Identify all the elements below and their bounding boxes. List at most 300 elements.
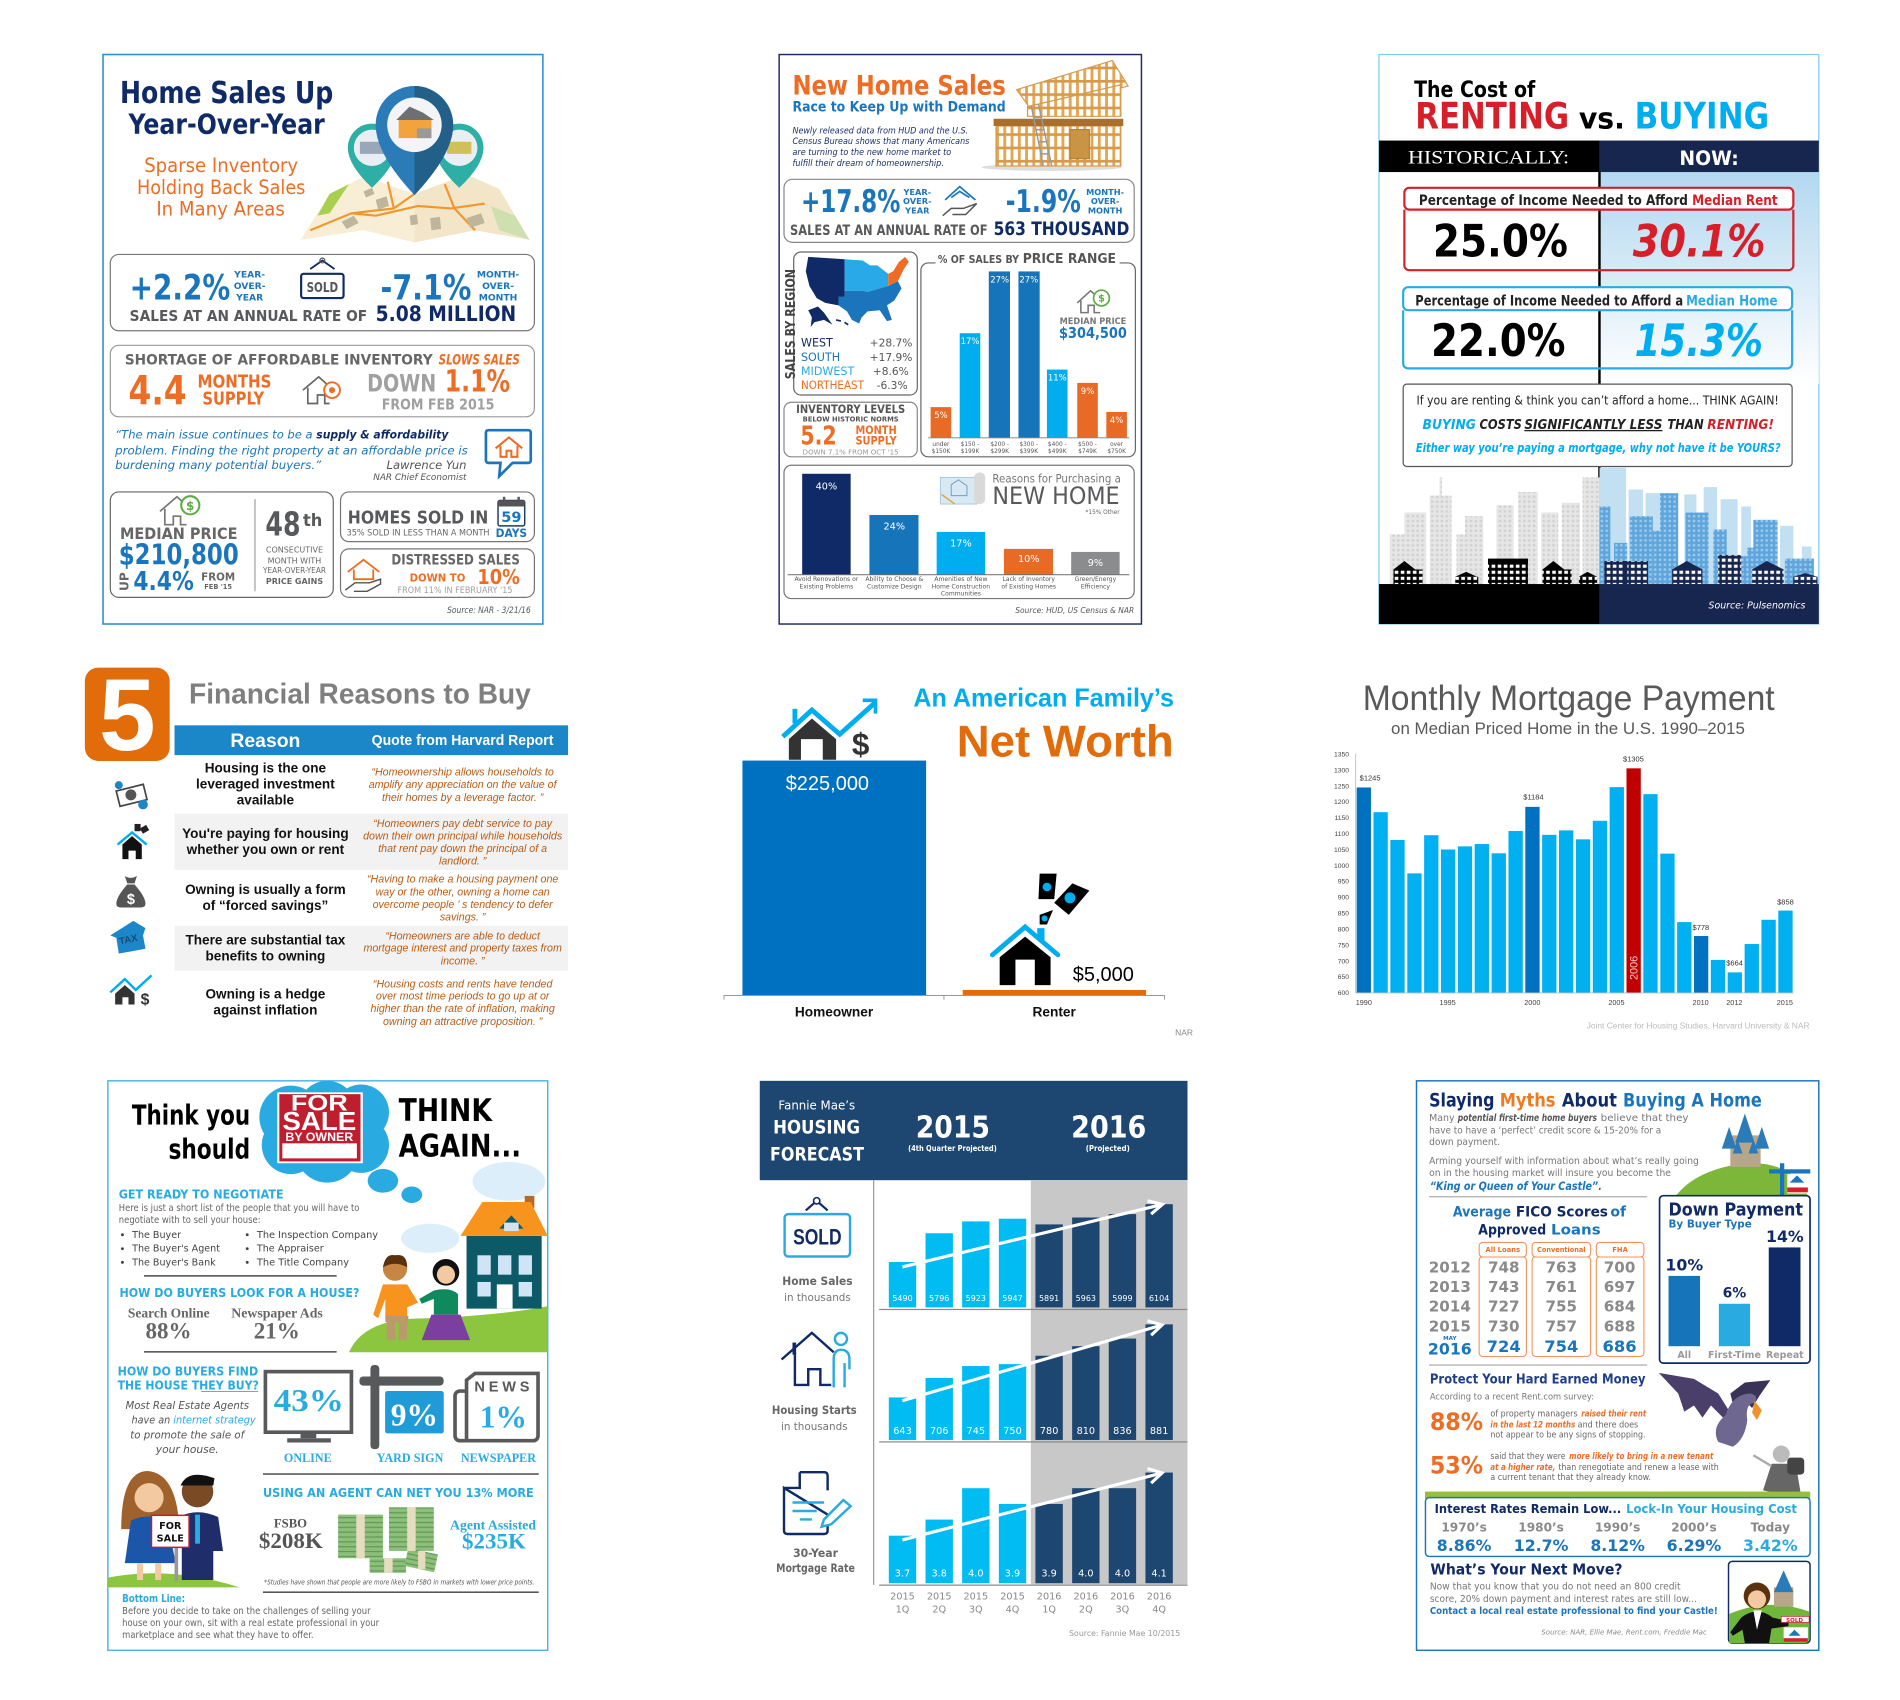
- panel: distressed sales: DOWN TO: [410, 573, 466, 585]
- heading: An American Family’s: [913, 684, 1174, 712]
- quotes column: way or the other, owning a home can: [376, 886, 550, 898]
- panel: interest rates: Interest Rates Remain Low...: [1435, 1502, 1621, 1516]
- source: Source: Pulsenomics: [1709, 600, 1805, 611]
- panel: sales stats: 563 THOUSAND: [994, 219, 1129, 240]
- section: protect money: 88%: [1430, 1408, 1483, 1436]
- icon: knight: [1753, 1446, 1804, 1493]
- section: negotiate: The Buyer's Bank: [131, 1257, 216, 1268]
- region table: MIDWEST: [801, 365, 854, 378]
- title: AGAIN...: [399, 1129, 521, 1165]
- icon: dragon: [1659, 1373, 1770, 1447]
- stat: online monitor: ONLINE: [284, 1451, 332, 1465]
- panel: distressed sales: [341, 549, 534, 597]
- chart: mortgage rate: 3.7: [895, 1569, 910, 1580]
- heading: Net Worth: [957, 716, 1174, 767]
- chart: mortgage rate: 4.0: [968, 1569, 984, 1580]
- bars: $500 -: [1078, 442, 1097, 448]
- quote: burdening many potential buyers.”: [115, 458, 322, 472]
- label: housing starts: [772, 1404, 857, 1433]
- panel: homes sold in days: 35% SOLD IN LESS THAN A MONTH: [347, 528, 490, 538]
- skyline: [1379, 468, 1819, 624]
- reasons column: You're paying for housing: [182, 826, 349, 841]
- section: protect money: said that they were: [1490, 1451, 1566, 1461]
- section: buyers look: Search Online: [128, 1305, 210, 1320]
- icon: sold sign: [301, 258, 344, 298]
- arrow: [902, 1469, 1162, 1540]
- panel: down payment: 10%: [1665, 1255, 1703, 1274]
- panel: median price: $210,800: [119, 539, 239, 572]
- bar chart: 800: [1338, 926, 1349, 933]
- label: home sales: [782, 1275, 853, 1304]
- icon: housing starts: [782, 1333, 849, 1387]
- panel: median home: Percentage of Income Needed to Afford a: [1415, 293, 1683, 309]
- panel: net worth chart: Homeowner: [795, 1005, 874, 1020]
- bars: $150 -: [961, 442, 979, 448]
- panel: median price: CONSECUTIVE: [266, 546, 323, 555]
- fico table: Average: [1453, 1205, 1511, 1221]
- panel: inventory shortage: SUPPLY: [202, 390, 264, 410]
- icon: sold sign: SOLD: [307, 281, 338, 296]
- title: [1414, 77, 1769, 137]
- section: how buyers find: HOW DO BUYERS FIND: [118, 1364, 258, 1379]
- section: negotiate: [119, 1188, 378, 1268]
- section: buyers look: 88%: [145, 1318, 191, 1344]
- stat: newspaper: [455, 1373, 538, 1465]
- intro text: Many: [1429, 1113, 1455, 1124]
- fico table: FHA: [1612, 1246, 1629, 1254]
- panel: median price: [110, 492, 333, 597]
- header: (4th Quarter Projected): [908, 1144, 997, 1153]
- table header: [175, 725, 568, 755]
- section: agent nets more: $208K: [259, 1529, 323, 1553]
- reasons column: benefits to owning: [205, 949, 325, 964]
- section: agent nets more: FSBO: [274, 1517, 307, 1531]
- panel: inventory shortage: 1.1%: [445, 364, 510, 399]
- panel: homes sold in days: DAYS: [496, 526, 527, 540]
- panel: homes sold in days: [341, 492, 534, 542]
- fico table: 2012: [1429, 1258, 1471, 1276]
- callout: think again: BUYING: [1423, 418, 1476, 433]
- section: how buyers find: have an: [132, 1413, 170, 1426]
- bars: $150K: [932, 449, 950, 455]
- bar chart: $664: [1726, 959, 1743, 968]
- panel: home sales up: [103, 55, 543, 624]
- chart: home sales: 5947: [1002, 1294, 1023, 1303]
- fico table: 748: [1488, 1258, 1520, 1276]
- title: The Cost of: [1414, 77, 1535, 103]
- quotes column: overcome people ’ s tendency to defer: [373, 899, 553, 911]
- reasons column: of “forced savings”: [202, 898, 328, 913]
- panel: inventory shortage: [110, 345, 534, 417]
- bars: of Existing Homes: [1001, 583, 1056, 590]
- bars: under: [932, 442, 950, 448]
- intro text: down payment.: [1429, 1137, 1500, 1148]
- panel: sales stats: OVER-: [482, 281, 514, 292]
- panel: monthly mortgage payment: [1334, 679, 1810, 1030]
- stat: yard sign: [359, 1365, 444, 1465]
- panel: down payment: Down Payment: [1669, 1200, 1803, 1220]
- icon: for sale cloud: FOR: [291, 1091, 348, 1116]
- reasons column: Housing is the one: [205, 761, 327, 776]
- panel: interest rates: Lock-In Your Housing Cost: [1626, 1502, 1797, 1516]
- title: About: [1562, 1090, 1617, 1111]
- fico table: 757: [1546, 1318, 1577, 1336]
- table header: Quote from Harvard Report: [372, 733, 554, 749]
- title: RENTING: [1415, 94, 1569, 137]
- bars: Home Construction: [932, 583, 990, 590]
- title: should: [168, 1132, 250, 1165]
- panel: median price: UP: [117, 572, 131, 591]
- section: negotiate: The Buyer's Agent: [131, 1244, 220, 1255]
- panel: sales stats: +17.8%: [801, 184, 900, 220]
- bar: homeowner: [742, 761, 926, 995]
- section: protect money: Protect Your Hard Earned Money: [1430, 1373, 1646, 1388]
- quotes column: income. ”: [441, 956, 485, 968]
- bars: $199K: [961, 449, 979, 455]
- fico table: 754: [1544, 1337, 1578, 1356]
- quote: supply & affordability: [316, 428, 450, 442]
- icon: speech bubble house: [486, 430, 531, 476]
- title: [792, 71, 1006, 115]
- bars: 5%: [934, 410, 948, 420]
- panel: inventory shortage: MONTHS: [198, 373, 271, 393]
- panel: median price: th: [303, 510, 322, 530]
- intro text: are turning to the new home market to: [792, 148, 951, 158]
- bars: $750K: [1107, 449, 1126, 455]
- region table: WEST: [801, 337, 833, 350]
- panel: price range chart: $304,500: [1059, 324, 1127, 342]
- reasons column: [182, 761, 349, 1018]
- panel: median rent: Median Rent: [1692, 193, 1778, 209]
- fico table: 684: [1604, 1298, 1635, 1316]
- illustration: agent with castle: SOLD: [1786, 1618, 1803, 1624]
- region table: NORTHEAST: [801, 379, 864, 392]
- panel: sales stats: +2.2%: [130, 267, 230, 308]
- panel: median home: [1403, 287, 1792, 368]
- chart: home sales: 5963: [1076, 1294, 1096, 1303]
- subtitle: [137, 154, 305, 221]
- icon: rising house: [783, 700, 875, 762]
- quarter labels: 2015: [890, 1591, 915, 1602]
- panel: inventory levels: SUPPLY: [855, 435, 898, 448]
- subtitle: Sparse Inventory: [144, 154, 298, 177]
- icon: for sale cloud: [259, 1081, 422, 1203]
- callout: think again: THAN: [1667, 418, 1704, 433]
- panel: sales by region: [784, 252, 917, 395]
- intro text: [1429, 1113, 1699, 1193]
- quotes column: “Housing costs and rents have tended: [373, 978, 553, 990]
- panel: sales stats: SALES AT AN ANNUAL RATE OF: [130, 307, 367, 325]
- bar chart: $1184: [1523, 793, 1544, 802]
- quotes column: that rent pay down the principal of a: [378, 843, 547, 855]
- fico table: MAY: [1443, 1336, 1457, 1342]
- panel: median price: MONTH WITH: [268, 556, 321, 565]
- bars: Amenities of New: [934, 576, 987, 583]
- bar: renter: $5,000: [1073, 964, 1134, 986]
- quotes column: amplify any appreciation on the value of: [369, 779, 558, 791]
- icon: money bag: $: [127, 892, 135, 908]
- panel: interest rates: [1425, 1492, 1810, 1556]
- section: how buyers find: internet strategy: [173, 1413, 256, 1426]
- bar chart: 2012: [1726, 998, 1742, 1007]
- panel: inventory levels: MONTH: [855, 424, 897, 437]
- region table: +28.7%: [870, 337, 912, 350]
- header: [760, 1081, 1187, 1180]
- stat: yard sign: 9%: [391, 1397, 438, 1432]
- illustration: agent with castle: [1729, 1561, 1810, 1643]
- quote: [114, 428, 468, 483]
- section: next move: Source: NAR, Ellie Mae, Rent.com, Freddie Mac: [1541, 1628, 1707, 1637]
- title: New Home Sales: [792, 71, 1006, 102]
- intro text: on in the housing market will insure you become the: [1429, 1168, 1671, 1179]
- panel: sales stats: MONTH: [1088, 205, 1122, 215]
- icon: rising house: $: [852, 726, 870, 762]
- panel: median price: PRICE GAINS: [266, 577, 323, 586]
- intro text: have to have a ‘perfect’ credit score & 15-20% for a: [1429, 1125, 1661, 1136]
- bars: Communities: [941, 591, 981, 598]
- panel: slaying myths: [1417, 1081, 1819, 1650]
- quarter labels: 4Q: [1006, 1604, 1020, 1615]
- panel: sales stats: YEAR-: [233, 269, 265, 280]
- illustration: house and couple: [349, 1162, 548, 1352]
- panel: sales stats: YEAR-: [902, 187, 931, 197]
- bars: over: [1110, 442, 1124, 448]
- panel: median price: 48: [265, 506, 301, 544]
- panel: interest rates: 3.42%: [1743, 1536, 1798, 1555]
- icon: house with clock: [303, 377, 340, 403]
- title: BUYING: [1635, 94, 1769, 137]
- callout: think again: SIGNIFICANTLY LESS: [1524, 418, 1662, 433]
- quarter labels: 2016: [1074, 1591, 1098, 1602]
- bars: 40%: [816, 482, 837, 493]
- panel: housing forecast: [760, 1081, 1187, 1638]
- section: negotiate: The Buyer: [131, 1230, 181, 1241]
- panel: down payment: [1660, 1196, 1810, 1363]
- label: mortgage rate: Mortgage Rate: [776, 1562, 855, 1575]
- fico table: 727: [1488, 1298, 1520, 1316]
- icon: median price house: $: [1098, 294, 1105, 305]
- arrow: [902, 1321, 1162, 1401]
- bar chart: 2005: [1608, 998, 1625, 1007]
- quotes column: “Homeowners pay debt service to pay: [373, 818, 553, 830]
- bottom line: Before you decide to take on the challenges of selling your: [122, 1606, 371, 1617]
- panel: new home sales: [779, 55, 1141, 624]
- panel: reasons for purchasing: *15% Other: [1086, 510, 1120, 516]
- label: home sales: Home Sales: [782, 1275, 853, 1288]
- label: housing starts: Housing Starts: [772, 1404, 857, 1417]
- icon: rising house: $: [141, 991, 150, 1008]
- callout: think again: [1403, 384, 1792, 467]
- quotes column: over most time periods to go up at or: [376, 991, 550, 1003]
- source: Source: HUD, US Census & NAR: [1015, 606, 1134, 615]
- chart: mortgage rate: 4.0: [1078, 1569, 1094, 1580]
- callout: think again: COSTS: [1480, 418, 1522, 433]
- icon: house in hand: [943, 187, 977, 216]
- bars: Efficiency: [1081, 583, 1110, 590]
- panel: five financial reasons: [85, 658, 568, 1028]
- bar chart: 950: [1338, 879, 1349, 886]
- icon: renter house with flying money: [992, 874, 1089, 985]
- icon: sold sign: [785, 1198, 850, 1257]
- section: negotiate: The Appraiser: [256, 1244, 324, 1255]
- bars: 17%: [961, 336, 979, 346]
- intro text: [792, 126, 970, 169]
- bars: 9%: [1081, 386, 1094, 396]
- bar: renter: [963, 964, 1146, 995]
- reasons column: Owning is a hedge: [205, 986, 326, 1001]
- quote: NAR Chief Economist: [373, 473, 467, 483]
- bar chart: 2010: [1693, 998, 1709, 1007]
- bars: $200 -: [990, 442, 1009, 448]
- title: Home Sales Up: [120, 76, 333, 111]
- heading: Monthly Mortgage Payment: [1363, 679, 1775, 718]
- chart: housing starts: 706: [930, 1426, 948, 1437]
- panel: price range chart: PRICE RANGE: [1023, 252, 1116, 267]
- bars: 10%: [1018, 554, 1040, 565]
- fico table: 2015: [1429, 1318, 1471, 1336]
- icon: mortgage document: [784, 1472, 851, 1534]
- stat: yard sign: YARD SIGN: [377, 1451, 444, 1465]
- icon: calendar: 59: [501, 510, 521, 526]
- panel: net worth chart: [724, 684, 1193, 1038]
- panel: net worth chart: NAR: [1175, 1028, 1193, 1038]
- panel: distressed sales: DISTRESSED SALES: [391, 553, 520, 569]
- quarter labels: 2015: [1000, 1591, 1025, 1602]
- panel: price range chart: MEDIAN PRICE: [1060, 317, 1126, 327]
- illustration: agents with for sale sign: SALE: [157, 1533, 184, 1544]
- section: protect money: than renegotiate and renew a lease with: [1558, 1462, 1719, 1472]
- icon: blueprint: [940, 473, 985, 504]
- panel: inventory levels: DOWN 7.1% FROM OCT '15: [803, 447, 899, 456]
- panel: sales stats: OVER-: [234, 281, 266, 292]
- panel: sales stats: MONTH-: [1086, 187, 1124, 197]
- arrow: [902, 1201, 1162, 1267]
- fico table: Conventional: [1537, 1246, 1586, 1254]
- chart: home sales: [879, 1201, 1187, 1310]
- quarter labels: 1Q: [896, 1604, 910, 1615]
- bars: 11%: [1048, 372, 1067, 382]
- heading: [913, 684, 1174, 767]
- quotes column: [363, 766, 563, 1028]
- chart: home sales: 6104: [1149, 1294, 1169, 1303]
- fico table: 697: [1604, 1278, 1635, 1296]
- intro text: potential first-time home buyers: [1457, 1113, 1597, 1124]
- title: [132, 1093, 521, 1165]
- section: protect money: at a higher rate,: [1490, 1462, 1555, 1472]
- section: buyers look: [120, 1286, 359, 1344]
- panel: sales stats: MONTH-: [477, 269, 519, 280]
- panel: inventory shortage: FROM FEB 2015: [382, 396, 494, 414]
- quotes column: owning an attractive proposition. ”: [383, 1016, 543, 1028]
- callout: think again: RENTING!: [1707, 418, 1774, 433]
- bar chart: [1334, 751, 1794, 1007]
- section: protect money: [1430, 1373, 1719, 1482]
- quarter labels: 2016: [1110, 1591, 1135, 1602]
- section: negotiate: The Title Company: [256, 1257, 349, 1268]
- section: next move: Now that you know that you do not need an 800 credit: [1430, 1582, 1681, 1593]
- quarter labels: 2015: [963, 1591, 988, 1602]
- stat: newspaper: NEWS: [474, 1380, 530, 1396]
- section: buyers look: Newspaper Ads: [231, 1305, 323, 1320]
- title: Buying A Home: [1623, 1090, 1762, 1111]
- fico table: Loans: [1551, 1223, 1601, 1239]
- section: protect money: 53%: [1430, 1451, 1483, 1479]
- bars: [788, 474, 1129, 598]
- panel: sales stats: OVER-: [903, 196, 932, 206]
- header: 2015: [916, 1111, 990, 1146]
- section: buyers look: HOW DO BUYERS LOOK FOR A HOUSE?: [120, 1286, 359, 1300]
- panel: interest rates: 8.12%: [1590, 1536, 1645, 1555]
- section: next move: What’s Your Next Move?: [1430, 1561, 1622, 1579]
- fico table: 688: [1604, 1318, 1635, 1336]
- intro text: “King or Queen of Your Castle”.: [1430, 1180, 1602, 1193]
- title: Slaying: [1429, 1090, 1495, 1111]
- panel: interest rates: 2000’s: [1671, 1521, 1717, 1535]
- bar chart: 650: [1338, 974, 1349, 981]
- section: protect money: of property managers: [1490, 1408, 1578, 1418]
- reasons column: leveraged investment: [196, 777, 335, 792]
- panel: median price: FROM: [201, 571, 235, 583]
- bar chart: 2000: [1524, 998, 1540, 1007]
- icon: for sale cloud: BY OWNER: [285, 1130, 353, 1144]
- icon: number five: 5: [99, 658, 156, 772]
- section: how buyers find: your house.: [155, 1443, 219, 1456]
- icon: tax house: [110, 921, 145, 954]
- reasons column: against inflation: [213, 1003, 317, 1018]
- bars: Ability to Choose &: [865, 576, 923, 583]
- bars: Avoid Renovations or: [795, 576, 859, 583]
- quarter labels: 2016: [1037, 1591, 1061, 1602]
- panel: median rent: 25.0%: [1433, 214, 1568, 267]
- chart: housing starts: 810: [1077, 1426, 1095, 1437]
- panel: median price: MEDIAN PRICE: [120, 524, 238, 543]
- panel: interest rates: Today: [1751, 1521, 1790, 1535]
- section: how buyers find: to promote the sale of: [130, 1428, 246, 1441]
- icon: rising house: [110, 975, 151, 1008]
- section: protect money: According to a recent Rent.com survey:: [1430, 1392, 1594, 1403]
- region table: [801, 337, 912, 392]
- bar chart: $1305: [1623, 755, 1644, 764]
- panel: reasons for purchasing: [784, 465, 1134, 599]
- bar chart: 1250: [1334, 783, 1349, 790]
- panel: sales stats: [784, 179, 1134, 242]
- panel: sales stats: YEAR: [904, 205, 930, 215]
- bars: Green/Energy: [1075, 576, 1117, 583]
- panel: median price: YEAR-OVER-YEAR: [262, 566, 326, 575]
- bars: $499K: [1048, 449, 1067, 455]
- bars: 9%: [1088, 558, 1103, 569]
- panel: inventory shortage: DOWN: [367, 369, 436, 397]
- bar chart: 700: [1338, 958, 1349, 965]
- icon: US map: [806, 257, 909, 327]
- label: mortgage rate: [776, 1547, 855, 1575]
- bar chart: 750: [1338, 942, 1349, 949]
- fico table: Approved: [1478, 1223, 1546, 1239]
- quarter labels: 3Q: [969, 1604, 983, 1615]
- section: negotiate: Here is just a short list of the people that you will have to: [119, 1203, 360, 1214]
- panel: sales stats: OVER-: [1091, 196, 1119, 206]
- bar chart: 1100: [1334, 831, 1349, 838]
- header bar: historically: [1379, 141, 1599, 172]
- bar chart: 1200: [1334, 799, 1349, 806]
- stat: online monitor: [265, 1372, 351, 1465]
- quote: problem. Finding the right property at an affordable price is: [114, 443, 468, 457]
- title: Year-Over-Year: [128, 107, 325, 140]
- quotes column: mortgage interest and property taxes from: [363, 943, 562, 955]
- panel: distressed sales: FROM 11% IN FEBRUARY '15: [397, 585, 513, 595]
- illustration: agents with for sale sign: FOR: [159, 1521, 182, 1532]
- label: home sales: in thousands: [784, 1292, 851, 1304]
